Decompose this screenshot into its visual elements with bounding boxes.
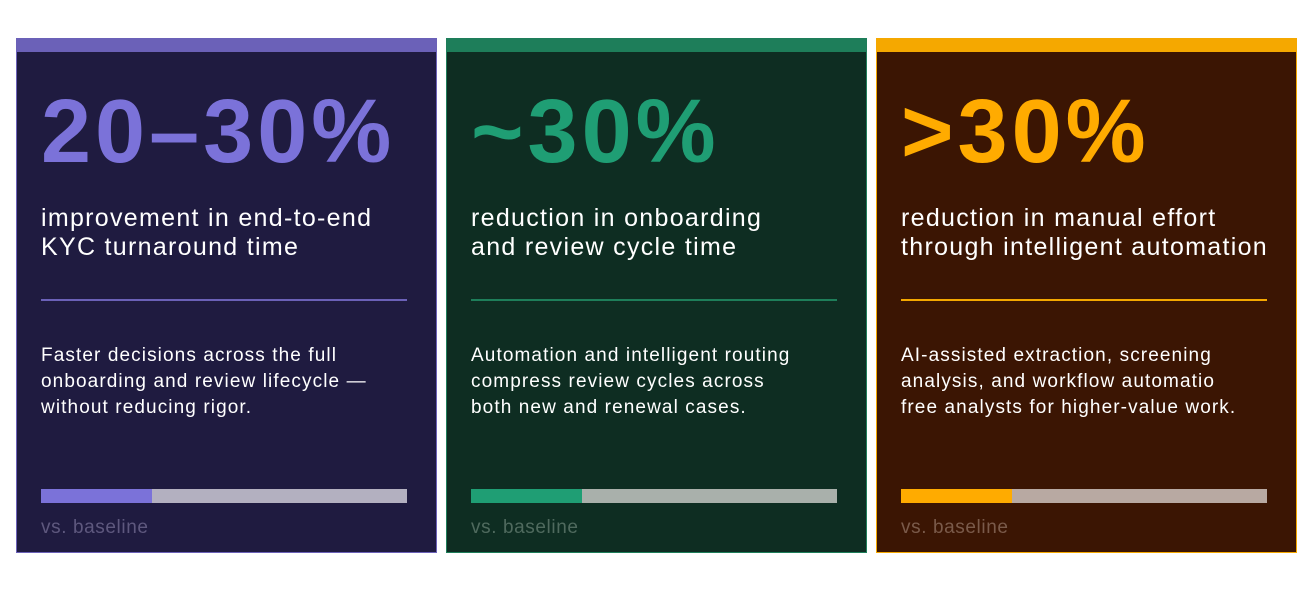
subtitle: through intelligent automation: [901, 233, 1268, 261]
progress bar: [41, 489, 407, 503]
subtitle: reduction in onboarding: [471, 204, 762, 232]
panel: manual effort: [876, 38, 1297, 553]
body text: [41, 345, 367, 418]
body text: [901, 345, 1236, 418]
subtitle: [41, 204, 372, 261]
subtitle: [901, 204, 1268, 261]
body text: free analysts for higher-value work.: [901, 397, 1236, 418]
progress bar: [901, 489, 1267, 503]
body text: Automation and intelligent routing: [471, 345, 790, 366]
body text: onboarding and review lifecycle —: [41, 371, 367, 392]
body text: both new and renewal cases.: [471, 397, 747, 418]
baseline label: vs. baseline: [471, 517, 579, 538]
panel: KYC turnaround: [16, 38, 437, 553]
body text: Faster decisions across the full: [41, 345, 337, 366]
big number: >30%: [901, 82, 1150, 182]
body text: AI-assisted extraction, screening: [901, 345, 1212, 366]
big number: ~30%: [471, 82, 720, 182]
baseline label: vs. baseline: [41, 517, 149, 538]
baseline label: vs. baseline: [901, 517, 1009, 538]
subtitle: and review cycle time: [471, 233, 737, 261]
big number: 20–30%: [41, 82, 395, 182]
subtitle: [471, 204, 762, 261]
subtitle: KYC turnaround time: [41, 233, 299, 261]
progress bar: [471, 489, 837, 503]
body text: compress review cycles across: [471, 371, 765, 392]
subtitle: reduction in manual effort: [901, 204, 1216, 232]
body text: analysis, and workflow automatio: [901, 371, 1215, 392]
panel: onboarding cycle: [446, 38, 867, 553]
body text: [471, 345, 790, 418]
body text: without reducing rigor.: [41, 397, 252, 418]
subtitle: improvement in end-to-end: [41, 204, 372, 232]
